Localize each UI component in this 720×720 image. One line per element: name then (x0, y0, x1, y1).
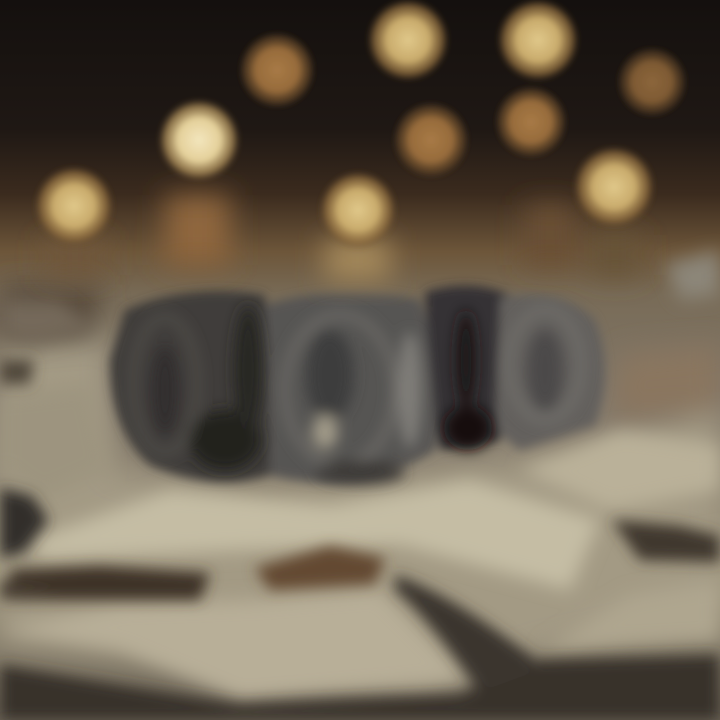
shadow: bottom edge (0, 655, 720, 720)
die: far right (495, 294, 605, 450)
light: centre low (318, 170, 398, 250)
light: top centre (366, 0, 450, 82)
paper field (0, 285, 720, 690)
bokeh lights (33, 0, 688, 250)
die: left (110, 291, 278, 482)
light: bright left (157, 98, 241, 182)
light: middle amber right (494, 85, 568, 159)
dark folds and shadows (0, 360, 720, 720)
die: right dark (425, 286, 510, 450)
light: middle amber centre (392, 101, 470, 179)
light reflections (45, 195, 640, 280)
die: centre (265, 292, 438, 482)
light: far left (33, 165, 115, 247)
light: far right amber (616, 46, 688, 118)
dice group (110, 286, 605, 482)
light: upper amber (238, 31, 316, 109)
light: top right (496, 0, 580, 82)
light: right low (572, 145, 656, 229)
bright paper sheets (0, 250, 720, 700)
dice details (133, 305, 581, 484)
